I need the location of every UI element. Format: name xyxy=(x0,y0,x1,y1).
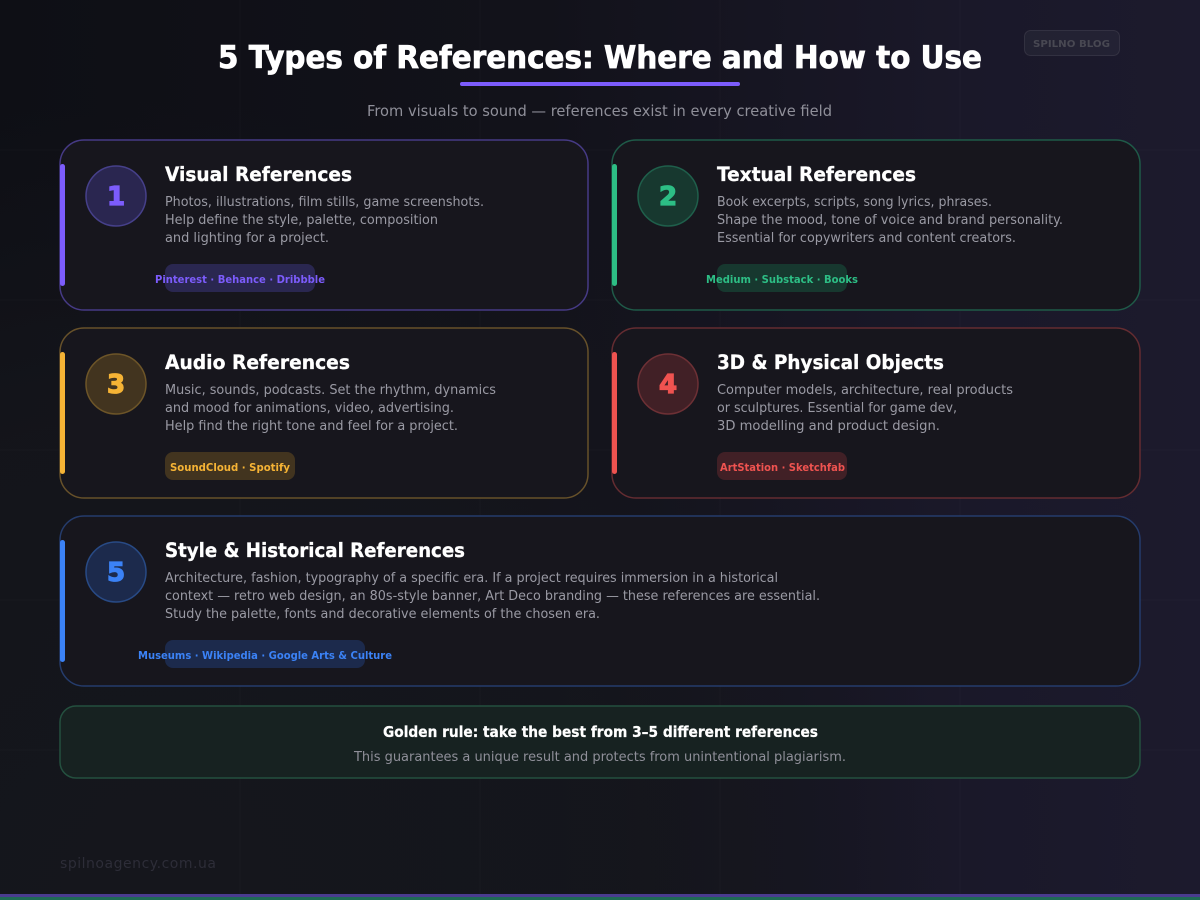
body text: Study the palette, fonts and decorative elements of the chosen era. xyxy=(165,607,600,622)
icon: number 4: 4 xyxy=(659,370,677,400)
title underline xyxy=(460,82,740,86)
accent bar xyxy=(60,164,65,286)
icon: number 1 xyxy=(86,166,146,226)
body text: Architecture, fashion, typography of a specific era. If a project requires immersion in a historical xyxy=(165,571,778,586)
panel: textual references xyxy=(612,140,1140,310)
footer url: spilnoagency.com.ua xyxy=(60,856,216,872)
body text xyxy=(717,195,1063,246)
icon: number 3 xyxy=(86,354,146,414)
body text xyxy=(717,383,1013,434)
body text: and mood for animations, video, advertising. xyxy=(165,401,454,416)
body text: Computer models, architecture, real products xyxy=(717,383,1013,398)
callout: golden rule xyxy=(60,706,1140,778)
tag: Medium · Substack · Books xyxy=(706,273,858,286)
body text: context — retro web design, an 80s-style banner, Art Deco branding — these references are essential. xyxy=(165,589,820,604)
title: 5 Types of References: Where and How to Use xyxy=(218,40,982,76)
heading: 3D & Physical Objects xyxy=(717,351,944,374)
tag xyxy=(155,264,325,292)
icon: number 5: 5 xyxy=(107,558,125,588)
subtitle: From visuals to sound — references exist in every creative field xyxy=(367,102,832,120)
icon: number 1: 1 xyxy=(107,182,125,212)
tag: Museums · Wikipedia · Google Arts & Culture xyxy=(138,649,392,662)
body text: Music, sounds, podcasts. Set the rhythm, dynamics xyxy=(165,383,496,398)
tag xyxy=(138,640,392,668)
badge: Spilno Blog: SPILNO BLOG xyxy=(1033,39,1110,50)
body text: Help define the style, palette, composition xyxy=(165,213,438,228)
tag xyxy=(717,452,847,480)
accent bar xyxy=(612,164,617,286)
tag: SoundCloud · Spotify xyxy=(170,461,290,474)
tag xyxy=(165,452,295,480)
badge: Spilno Blog xyxy=(1024,30,1120,56)
accent bar xyxy=(60,540,65,662)
body text: Essential for copywriters and content creators. xyxy=(717,231,1016,246)
body text xyxy=(165,383,496,434)
icon: number 3: 3 xyxy=(107,370,125,400)
body text: Photos, illustrations, film stills, game screenshots. xyxy=(165,195,484,210)
accent bar xyxy=(60,352,65,474)
body text: 3D modelling and product design. xyxy=(717,419,940,434)
tag: ArtStation · Sketchfab xyxy=(720,461,845,474)
panel: 3D and physical objects xyxy=(612,328,1140,498)
heading: Audio References xyxy=(165,351,350,374)
heading: Visual References xyxy=(165,163,352,186)
body text: or sculptures. Essential for game dev, xyxy=(717,401,957,416)
icon: number 2: 2 xyxy=(659,182,677,212)
callout: golden rule: Golden rule: take the best from 3–5 different references xyxy=(383,723,818,741)
body text: Help find the right tone and feel for a project. xyxy=(165,419,458,434)
body text: Shape the mood, tone of voice and brand personality. xyxy=(717,213,1063,228)
icon: number 4 xyxy=(638,354,698,414)
bottom stripe xyxy=(0,894,1200,900)
callout: golden rule: This guarantees a unique result and protects from unintentional plagiarism. xyxy=(353,750,846,765)
panel: visual references xyxy=(60,140,588,310)
panel: style and historical references xyxy=(60,516,1140,686)
panel: audio references xyxy=(60,328,588,498)
accent bar xyxy=(612,352,617,474)
icon: number 2 xyxy=(638,166,698,226)
body text xyxy=(165,571,820,622)
tag xyxy=(706,264,858,292)
body text xyxy=(165,195,484,246)
heading: Textual References xyxy=(717,163,916,186)
body text: and lighting for a project. xyxy=(165,231,329,246)
heading: Style & Historical References xyxy=(165,539,465,562)
tag: Pinterest · Behance · Dribbble xyxy=(155,273,325,286)
icon: number 5 xyxy=(86,542,146,602)
body text: Book excerpts, scripts, song lyrics, phrases. xyxy=(717,195,992,210)
